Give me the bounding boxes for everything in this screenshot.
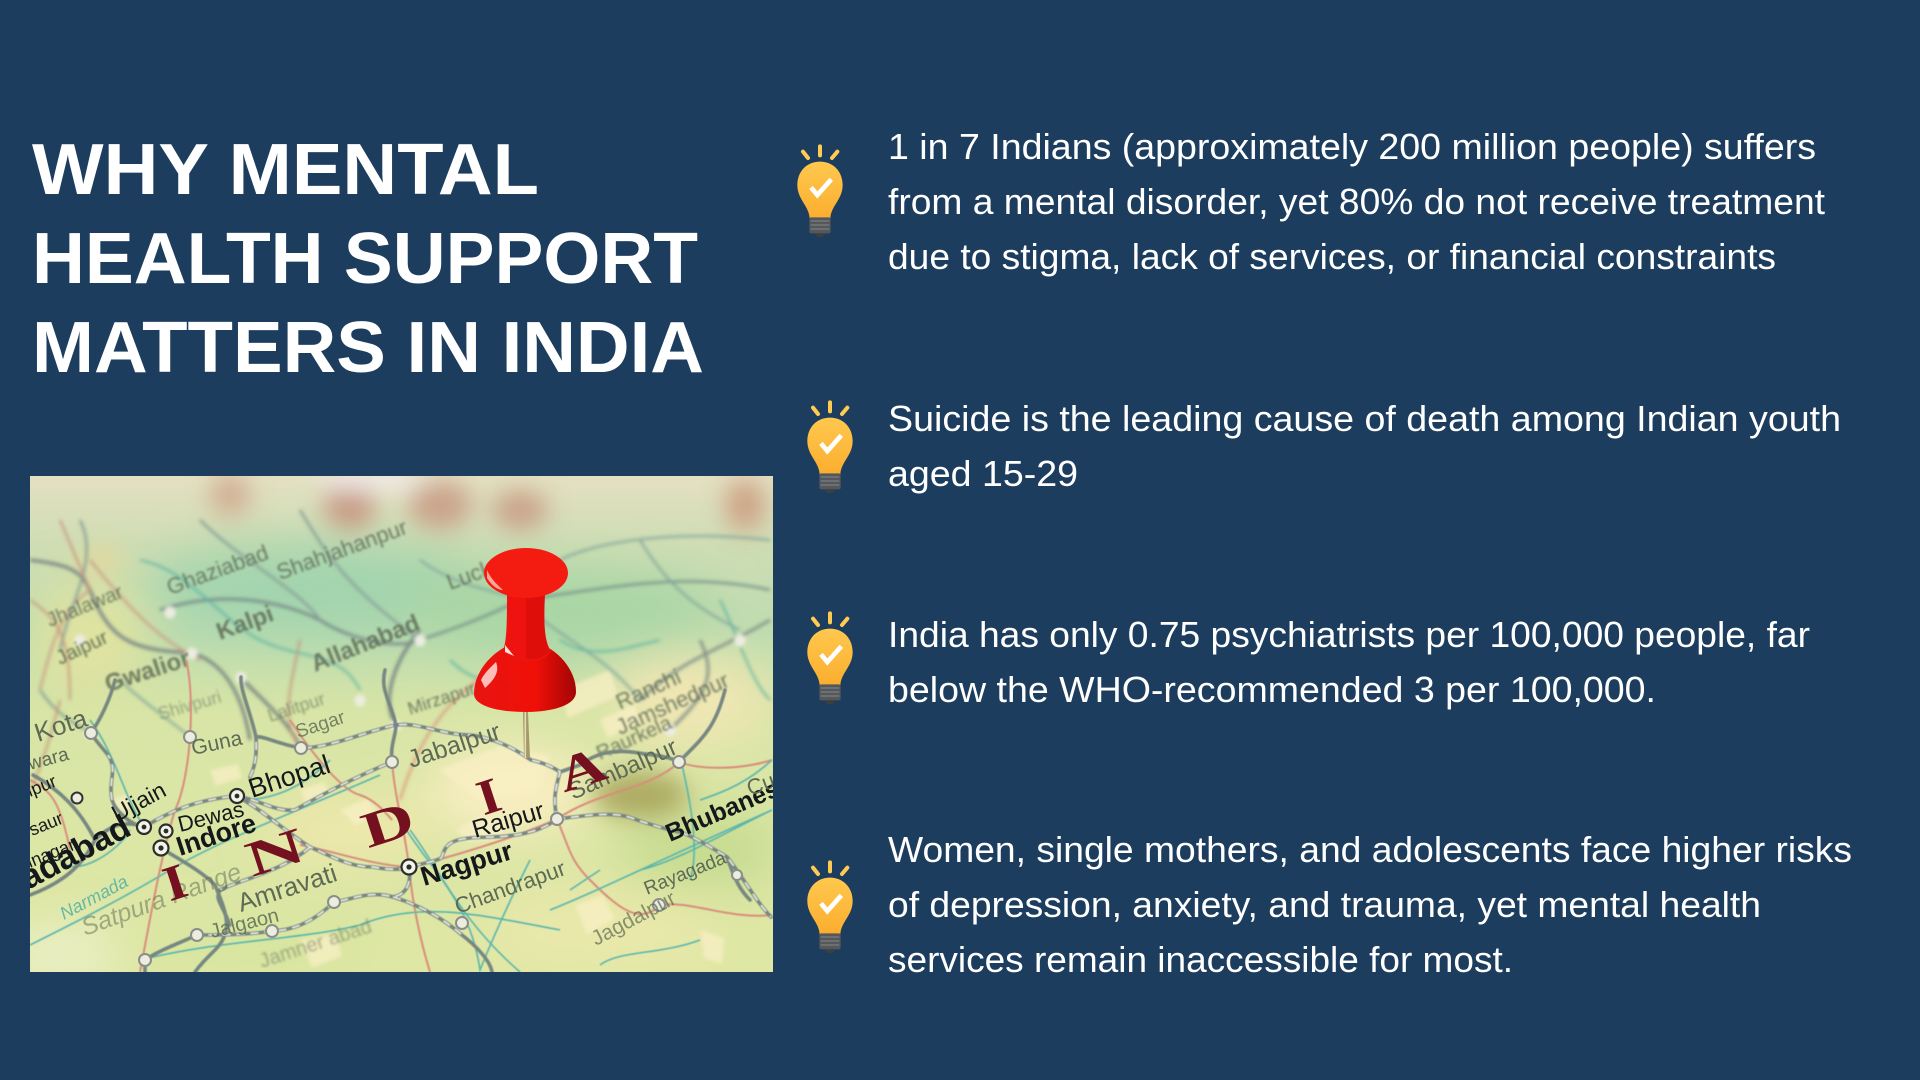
map photo with red pin on India: Lalitpur (265, 689, 327, 726)
text block: women and adolescents: Women, single mothers, and adolescents face higher risks (888, 829, 1852, 870)
map photo with red pin on India: Sambalpur (564, 734, 681, 805)
map photo with red pin on India: Jalgaon (208, 905, 281, 943)
blurred upper map lines and labels (30, 510, 770, 800)
text block: suicide: Suicide is the leading cause of death among Indian youth (888, 398, 1841, 439)
sharp city labels: saur (26, 808, 66, 840)
text block: women and adolescents: services remain inaccessible for most. (888, 939, 1513, 980)
map photo with red pin on India: Chandrapur (451, 855, 569, 919)
sharp city labels: Raipur (469, 797, 547, 844)
large country lettering: I (470, 766, 508, 826)
map photo with red pin on India: Guna (189, 727, 245, 760)
text block: psychiatrists: below the WHO-recommended 3 per 100,000. (888, 669, 1656, 710)
icon: lightbulb check 1 (797, 146, 843, 237)
large country lettering (162, 752, 610, 901)
icon: lightbulb check 2 (807, 402, 853, 493)
roads and rivers (30, 660, 772, 972)
map photo with red pin on India: Amravati (234, 857, 340, 918)
map photo with red pin on India: Rayagada (641, 848, 730, 900)
sharp city labels: Dewas (175, 796, 246, 837)
map photo with red pin on India: wara (25, 744, 71, 775)
large country lettering: D (354, 789, 421, 859)
map photo with red pin on India: Ranchi (612, 664, 685, 715)
map photo with red pin on India: Jamner abad (257, 916, 375, 973)
map photo with red pin on India: Allahabad (307, 610, 424, 678)
sharp city labels: Bhubanes (661, 775, 784, 848)
icon: lightbulb check 3 (807, 613, 853, 704)
map photo with red pin on India: Mirzapur (405, 678, 478, 719)
sharp city labels: ipur (24, 771, 59, 801)
text block: psychiatrists (888, 614, 1810, 710)
map photo with red pin on India (0, 466, 784, 979)
text block: women and adolescents: of depression, anxiety, and trauma, yet mental health (888, 884, 1761, 925)
title (32, 130, 704, 388)
title: MATTERS IN INDIA (32, 308, 704, 388)
large country lettering: I (156, 852, 194, 912)
cream mottling on the plain (110, 670, 724, 968)
text block: prevalence (888, 126, 1825, 277)
text block: prevalence: 1 in 7 Indians (approximately 200 million people) suffers (888, 126, 1816, 167)
map photo with red pin on India: Kota (31, 702, 91, 748)
title: HEALTH SUPPORT (32, 219, 698, 299)
sharp city labels: Nagpur (417, 835, 517, 892)
text block: suicide: aged 15-29 (888, 453, 1078, 494)
map photo with red pin on India: Raurkela (593, 712, 676, 765)
map photo with red pin on India: Gwalior (102, 645, 194, 698)
red push pin (474, 548, 576, 758)
text block: suicide (888, 398, 1841, 494)
icon: lightbulb check 4 (807, 862, 853, 953)
map photo with red pin on India: Lucknow (443, 541, 533, 595)
map photo with red pin on India: Kalpi (213, 600, 277, 646)
map photo with red pin on India: Satpura Range (77, 858, 245, 942)
map photo with red pin on India: Shivpuri (156, 687, 224, 724)
text block: psychiatrists: India has only 0.75 psychiatrists per 100,000 people, far (888, 614, 1810, 655)
sharp city labels (30, 754, 773, 888)
map photo with red pin on India: Cut (743, 765, 784, 801)
sharp city labels: Bhopal (245, 749, 334, 804)
map photo with red pin on India: Ghaziabad (163, 540, 272, 600)
text block: prevalence: from a mental disorder, yet 80% do not receive treatment (888, 181, 1825, 222)
sharp city labels: inagar (24, 834, 78, 872)
sharp city labels: Ujjain (107, 776, 170, 826)
large country lettering: N (238, 816, 311, 888)
sharp city labels: Indore (173, 808, 260, 862)
map photo with red pin on India: Jagdalpur (588, 887, 680, 950)
map photo with red pin on India: Narmada (56, 871, 131, 924)
map photo with red pin on India: Sagar (293, 707, 348, 743)
map photo with red pin on India: Jabalpur (404, 717, 504, 774)
title: WHY MENTAL (32, 130, 539, 210)
city markers (137, 789, 416, 874)
map photo with red pin on India: Shahjahanpur (273, 514, 410, 585)
map photo with red pin on India: Jhalawar (44, 581, 126, 632)
large country lettering: A (550, 735, 613, 803)
map photo with red pin on India: Jamshedpur (612, 667, 733, 740)
sharp city labels: adabad (14, 808, 137, 897)
map photo with red pin on India: Jaipur (53, 626, 112, 670)
text block: prevalence: due to stigma, lack of services, or financial constraints (888, 236, 1776, 277)
text block: women and adolescents (888, 829, 1852, 980)
